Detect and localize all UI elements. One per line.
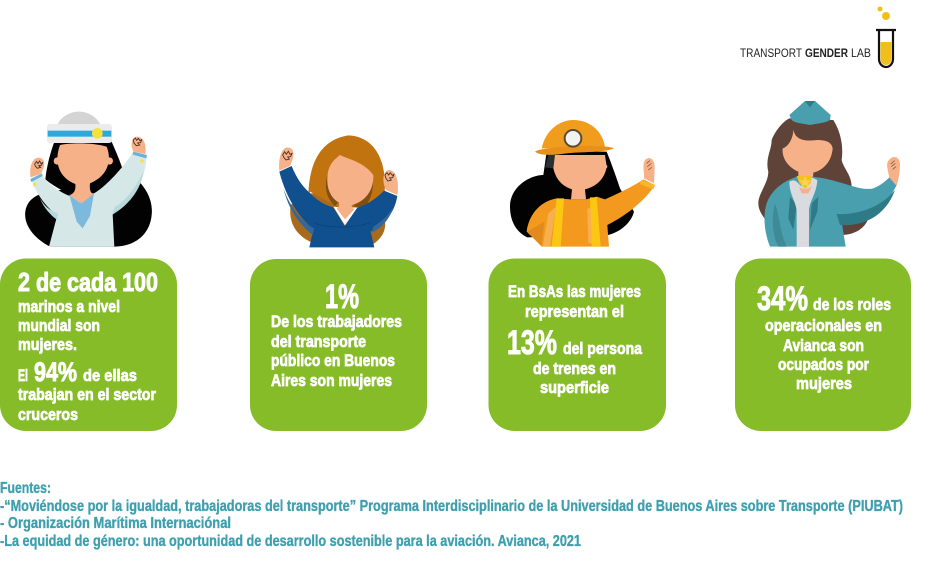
icon: test tube with bubbles xyxy=(876,6,896,67)
panel: seafarers statistic xyxy=(0,258,177,431)
panel text: 2 de cada 100: cruceros xyxy=(18,405,78,424)
logo wordmark xyxy=(740,48,871,60)
logo wordmark: GENDER xyxy=(805,48,849,60)
panel text: 2 de cada 100 xyxy=(18,267,158,424)
panel text: 34% xyxy=(757,280,891,393)
panel text: 1%: público en Buenos xyxy=(271,351,395,370)
panel text: 34%: mujeres xyxy=(796,374,852,393)
panel text: 1%: del transporte xyxy=(271,332,366,351)
sources text block: -La equidad de género: una oportunidad de desarrollo sostenible para la aviación. Avianca, 2021 xyxy=(0,533,581,550)
panel text: 2 de cada 100: 94% xyxy=(34,357,77,387)
panel text: 34%: 34% xyxy=(757,280,808,318)
panel text: 34%: de los roles xyxy=(813,295,891,314)
panel text: 13%: superficie xyxy=(540,378,609,397)
panel text: 2 de cada 100: El xyxy=(18,366,28,385)
panel text: 34%: operacionales en xyxy=(765,316,882,335)
sources text block: - Organización Marítima Internaciónal xyxy=(0,515,231,532)
panel text: 1% xyxy=(271,278,402,390)
panel text: 2 de cada 100: 2 de cada 100 xyxy=(18,267,158,297)
panel text: 2 de cada 100: mujeres. xyxy=(18,335,77,354)
figure: sailor woman xyxy=(25,112,152,247)
logo: Transport Gender Lab xyxy=(740,6,896,67)
panel text: 2 de cada 100: marinos a nivel xyxy=(18,297,120,316)
panel: trains statistic xyxy=(488,258,666,431)
panel text: 34%: ocupados por xyxy=(778,355,869,374)
panel: Avianca statistic xyxy=(735,258,911,431)
panel text: 1%: Aires son mujeres xyxy=(271,371,392,390)
sources text block xyxy=(0,480,903,550)
panel text: 2 de cada 100: mundial son xyxy=(18,316,100,335)
figure: miner with helmet xyxy=(510,120,655,247)
panel text: 13%: de trenes en xyxy=(533,359,616,378)
panel text: 13%: del persona xyxy=(563,339,642,358)
panel text: 1%: 1% xyxy=(325,278,359,316)
panel text: 13%: 13% xyxy=(507,324,557,362)
panel text: 1%: De los trabajadores xyxy=(271,312,402,331)
panel text: 2 de cada 100: de ellas xyxy=(83,366,137,385)
logo wordmark: TRANSPORT xyxy=(740,48,802,60)
panel text: 13%: En BsAs las mujeres xyxy=(508,282,641,301)
figure: flight attendant xyxy=(758,101,900,247)
panel text: 2 de cada 100: trabajan en el sector xyxy=(18,385,156,404)
figure: public transport worker xyxy=(279,135,398,247)
sources text block: Fuentes: xyxy=(0,480,51,497)
logo wordmark: LAB xyxy=(851,48,871,60)
panel text: 34%: Avianca son xyxy=(783,336,864,355)
panel: public transport statistic xyxy=(250,259,427,431)
panel text: 13%: representan el xyxy=(525,302,624,321)
panel text: 13% xyxy=(507,282,642,397)
